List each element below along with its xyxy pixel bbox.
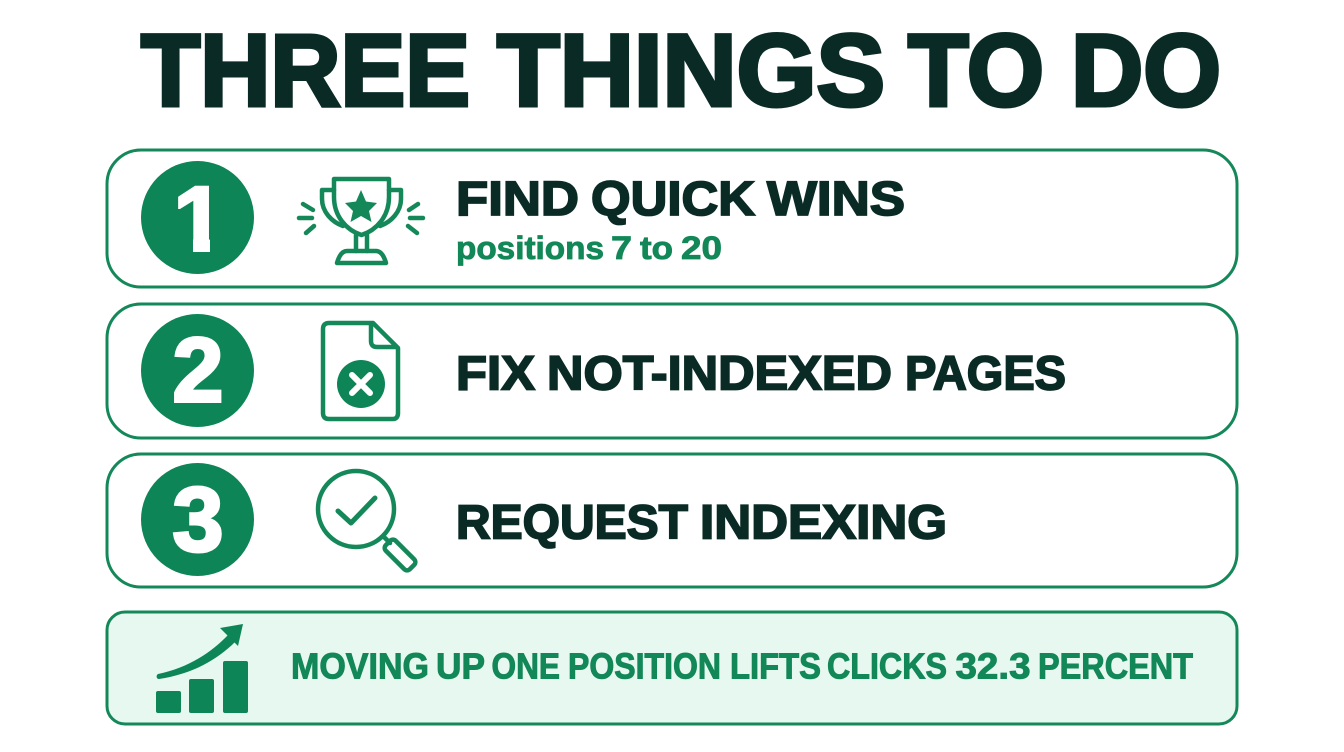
panel: step 3 request indexing [107, 454, 1237, 587]
callout text: UP [436, 646, 485, 686]
panel: callout [107, 612, 1237, 724]
callout text: PERCENT [1038, 646, 1193, 686]
panel: step 2 fix not-indexed pages [107, 304, 1237, 438]
panel: step 1 find quick wins [107, 150, 1237, 287]
subheading: positions 7 to 20: 7 [611, 230, 632, 266]
callout text [291, 646, 1193, 686]
number badge 1 [141, 161, 254, 274]
title: THREE [141, 14, 470, 128]
heading: fix not-indexed pages: NOT-INDEXED [547, 346, 892, 400]
heading: request indexing: INDEXING [700, 496, 947, 550]
number badge 1: 1 [173, 168, 225, 270]
number badge 2: 2 [172, 320, 224, 422]
callout text: POSITION [568, 646, 721, 686]
icon: trophy with star [299, 179, 423, 263]
callout text: MOVING [291, 646, 429, 686]
callout text: ONE [492, 646, 560, 686]
number badge 3: 3 [172, 469, 224, 571]
icon: magnifying glass with check [318, 471, 417, 572]
heading: find quick wins: WINS [767, 172, 905, 226]
heading: request indexing: REQUEST [456, 496, 688, 550]
icon: document with x [323, 323, 398, 419]
number badge 2 [141, 314, 254, 427]
icon: rising bars and arrow [156, 624, 248, 713]
heading: request indexing [456, 496, 947, 550]
subheading: positions 7 to 20: positions [456, 230, 604, 266]
heading: fix not-indexed pages [456, 346, 1066, 400]
title: TO [908, 14, 1044, 128]
callout text: LIFTS [730, 646, 821, 686]
heading: fix not-indexed pages: FIX [456, 346, 535, 400]
subheading: positions 7 to 20: to [640, 230, 673, 266]
title: THINGS [497, 14, 885, 128]
heading: fix not-indexed pages: PAGES [905, 346, 1066, 400]
heading: find quick wins [456, 172, 905, 226]
callout text: 32.3 [956, 646, 1030, 686]
subheading: positions 7 to 20: 20 [681, 230, 722, 266]
number badge 3 [141, 463, 254, 576]
subheading: positions 7 to 20 [456, 230, 722, 266]
heading: find quick wins: QUICK [591, 172, 755, 226]
title: DO [1071, 14, 1221, 128]
callout text: CLICKS [827, 646, 947, 686]
heading: find quick wins: FIND [456, 172, 579, 226]
title [141, 14, 1221, 128]
